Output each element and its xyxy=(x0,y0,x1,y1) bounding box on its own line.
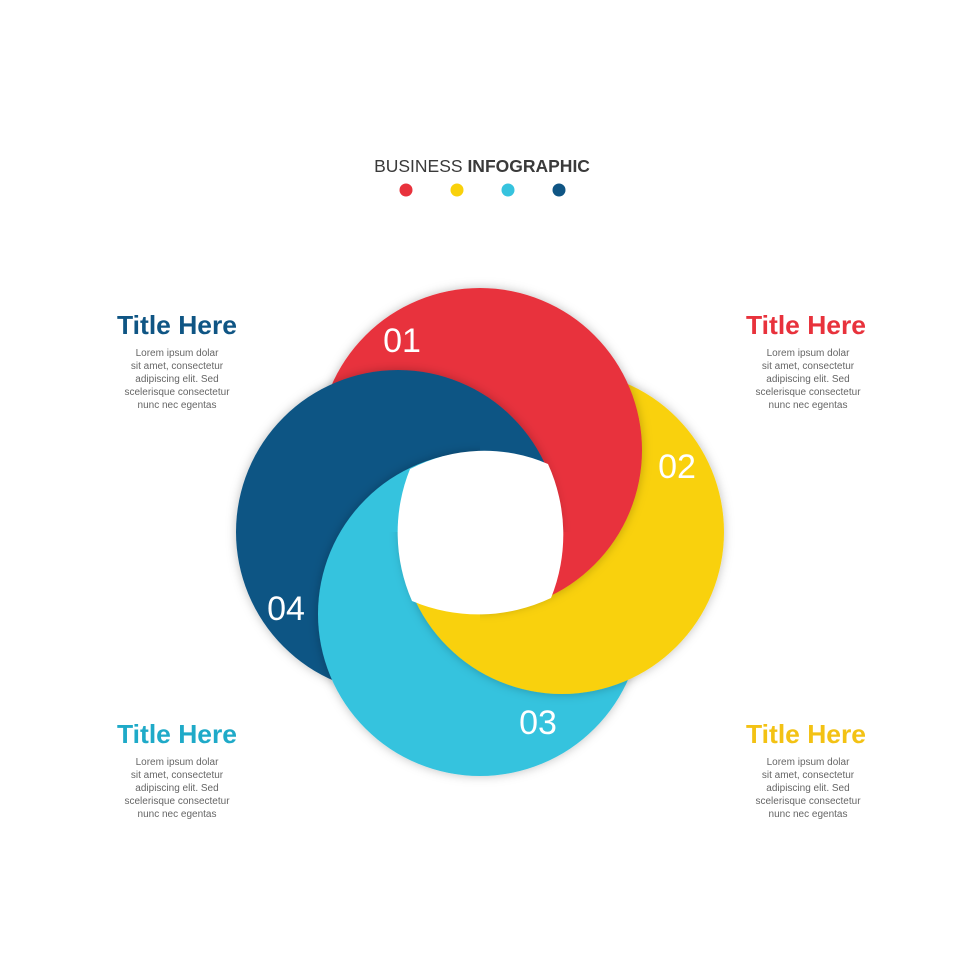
number 01: 01 xyxy=(383,322,421,360)
number 03: 03 xyxy=(519,704,557,742)
quadrant: bottom-left xyxy=(230,532,480,782)
text block: bottom-right: adipiscing elit. Sed xyxy=(766,783,850,794)
text block: bottom-right: Title Here xyxy=(746,719,866,749)
text block: top-left: Lorem ipsum dolar xyxy=(136,348,219,359)
quadrant: bottom-right xyxy=(480,532,730,782)
text block: top-left: Title Here xyxy=(117,310,237,340)
text block: top-left: sit amet, consectetur xyxy=(131,361,224,372)
text block: bottom-left: nunc nec egentas xyxy=(138,809,216,820)
text block: top-left: adipiscing elit. Sed xyxy=(135,374,219,385)
center hole xyxy=(398,451,563,614)
text block: bottom-right: nunc nec egentas xyxy=(769,809,847,820)
text block: top-right: nunc nec egentas xyxy=(769,400,847,411)
header xyxy=(374,156,590,196)
text block: bottom-left: Lorem ipsum dolar xyxy=(136,757,219,768)
text block: top-left: nunc nec egentas xyxy=(138,400,216,411)
text block: bottom-left: scelerisque consectetur xyxy=(124,796,230,807)
number 04: 04 xyxy=(267,590,305,628)
text block: bottom-right: Lorem ipsum dolar xyxy=(767,757,850,768)
text block: top-right: adipiscing elit. Sed xyxy=(766,374,850,385)
text block: bottom-right: scelerisque consectetur xyxy=(755,796,861,807)
text block: bottom-left: adipiscing elit. Sed xyxy=(135,783,219,794)
text block: top-left xyxy=(117,310,237,411)
text block: bottom-left: Title Here xyxy=(117,719,237,749)
text block: top-left: scelerisque consectetur xyxy=(124,387,230,398)
text block: bottom-right xyxy=(746,719,866,820)
text block: bottom-right: sit amet, consectetur xyxy=(762,770,855,781)
header: BUSINESS INFOGRAPHIC xyxy=(374,156,590,176)
number 02: 02 xyxy=(658,448,696,486)
text block: top-right xyxy=(746,310,866,411)
text block: top-right: scelerisque consectetur xyxy=(755,387,861,398)
quadrant: top-left xyxy=(230,282,480,532)
text block: bottom-left xyxy=(117,719,237,820)
quadrant: top-right xyxy=(480,282,730,532)
text block: top-right: Lorem ipsum dolar xyxy=(767,348,850,359)
ring diagram xyxy=(236,288,724,776)
text block: top-right: sit amet, consectetur xyxy=(762,361,855,372)
text block: bottom-left: sit amet, consectetur xyxy=(131,770,224,781)
text block: top-right: Title Here xyxy=(746,310,866,340)
